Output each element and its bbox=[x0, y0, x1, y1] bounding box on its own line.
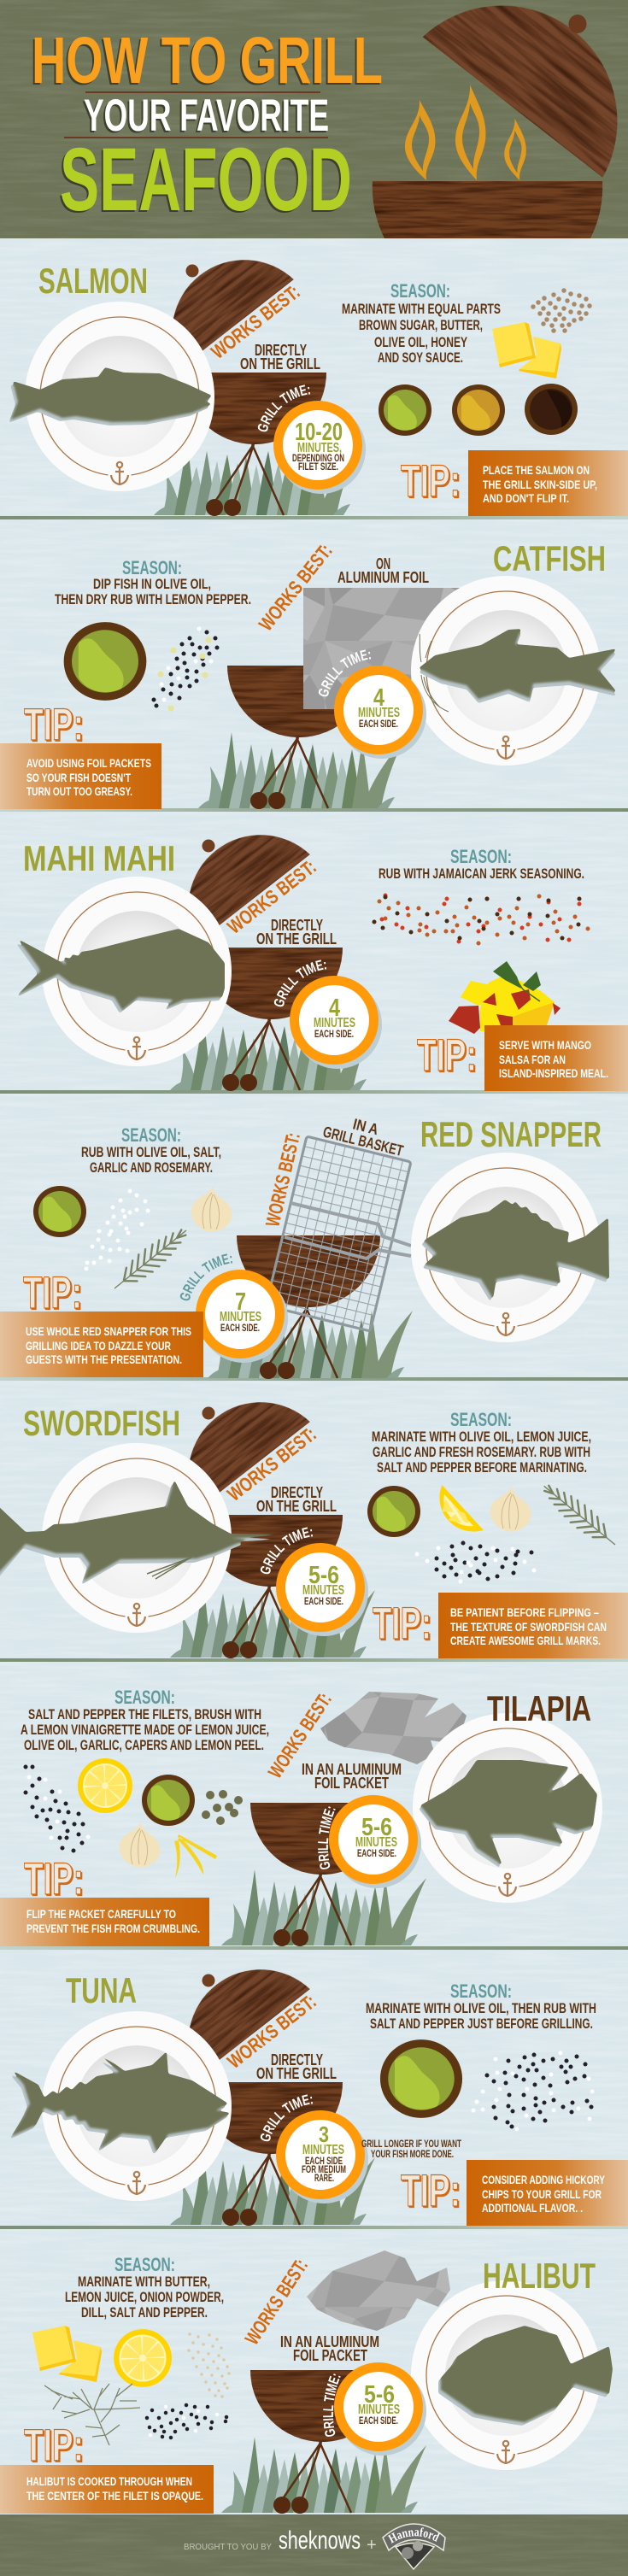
badge: time: FILET SIZE. bbox=[298, 462, 338, 472]
tip label: TIP: bbox=[401, 2166, 461, 2216]
heading: MAHI MAHI bbox=[23, 838, 175, 878]
icon: salt and pepper bbox=[417, 1543, 534, 1581]
text: grill longer note: YOUR FISH MORE DONE. bbox=[371, 2148, 454, 2160]
icon: catfish whiskers bbox=[420, 634, 449, 712]
icon: flames bbox=[405, 85, 526, 180]
text: method bbox=[321, 1115, 405, 1159]
text: method bbox=[256, 1484, 337, 1515]
badge: time bbox=[329, 1795, 421, 1888]
tip box bbox=[467, 2160, 628, 2226]
panel: red snapper bbox=[0, 1114, 609, 1379]
badge: time: 4 bbox=[373, 684, 384, 712]
badge: time: EACH SIDE. bbox=[359, 719, 398, 730]
footer panel bbox=[0, 2514, 628, 2576]
icon: swordfish fish bbox=[0, 1480, 292, 1585]
icon: garlic bbox=[120, 1822, 161, 1868]
text: season directions bbox=[366, 2001, 596, 2032]
badge: time: MINUTES bbox=[358, 2403, 400, 2417]
icon: grill bbox=[208, 1235, 413, 1379]
text: season directions: BROWN SUGAR, BUTTER, bbox=[359, 318, 483, 333]
panel: tuna bbox=[11, 1969, 628, 2226]
text: season directions bbox=[21, 1707, 269, 1753]
badge: time: MINUTES bbox=[355, 1835, 397, 1850]
tip label: TIP: bbox=[401, 456, 461, 507]
icon: salt bbox=[86, 1191, 148, 1269]
tip box: TURN OUT TOO GREASY. bbox=[26, 784, 132, 798]
icon: grill bbox=[160, 1374, 375, 1658]
badge: time: MINUTES, bbox=[297, 441, 342, 455]
tip box bbox=[0, 1898, 209, 1946]
badge: time bbox=[196, 1270, 288, 1363]
text: grill longer note bbox=[361, 2138, 461, 2160]
label: grill time: GRILL TIME: bbox=[260, 2094, 313, 2141]
icon: grill bbox=[221, 1803, 426, 1946]
icon: jerk seasoning bbox=[374, 895, 588, 943]
icon: grill bbox=[144, 232, 359, 516]
icon: catfish fish bbox=[419, 629, 617, 703]
text: season directions bbox=[342, 302, 501, 366]
section dividers bbox=[0, 516, 628, 2229]
icon: butter bbox=[492, 322, 561, 378]
icon: grill bbox=[198, 666, 403, 809]
badge: time: 7 bbox=[235, 1288, 246, 1316]
text: method: ON THE GRILL bbox=[256, 930, 337, 948]
badge: time: MINUTES bbox=[358, 706, 400, 720]
text: brought to you by: BROUGHT TO YOU BY bbox=[184, 2543, 272, 2552]
icon: salt and pepper bbox=[473, 2053, 592, 2129]
panel: catfish bbox=[0, 538, 615, 809]
icon: capers bbox=[206, 1794, 238, 1821]
icon: tilapia fish bbox=[419, 1760, 597, 1869]
icon: soy sauce bbox=[525, 384, 578, 435]
label: works best: WORKS BEST: bbox=[240, 2255, 312, 2349]
text: season directions: A LEMON VINAIGRETTE MADE OF LEMON JUICE, bbox=[21, 1722, 269, 1738]
text: season directions bbox=[65, 2274, 224, 2321]
icon: brown sugar bbox=[533, 290, 590, 331]
text: method: FOIL PACKET bbox=[293, 2347, 367, 2364]
label: season: SEASON: bbox=[122, 557, 182, 578]
text: season directions: MARINATE WITH EQUAL PARTS bbox=[342, 302, 501, 317]
badge: time: EACH SIDE bbox=[305, 2156, 343, 2167]
panel: swordfish bbox=[0, 1402, 628, 1658]
panel: salmon bbox=[9, 260, 628, 516]
badge: time: 10-20 bbox=[295, 419, 343, 446]
label: works best: WORKS BEST: bbox=[255, 539, 337, 635]
heading: SALMON bbox=[38, 261, 148, 301]
label: season: SEASON: bbox=[450, 1409, 512, 1430]
tip box: THE CENTER OF THE FILET IS OPAQUE. bbox=[26, 2489, 203, 2503]
tip box bbox=[484, 1025, 628, 1091]
logo: hannaford: Hannaford bbox=[388, 2527, 440, 2544]
badge: time bbox=[290, 976, 382, 1069]
tip box bbox=[0, 743, 161, 809]
text: season directions bbox=[55, 577, 251, 607]
icon: plate bbox=[413, 1713, 602, 1903]
tip box bbox=[438, 1593, 628, 1658]
badge: time bbox=[276, 2110, 368, 2203]
icon: foil packet bbox=[320, 1692, 467, 1764]
icon: lemon wedge bbox=[441, 1488, 481, 1530]
label: season: SEASON: bbox=[450, 1980, 512, 2002]
label: works best: WORKS BEST: bbox=[207, 280, 304, 363]
icon: swordfish fin bbox=[147, 1558, 191, 1579]
text: method: ON THE GRILL bbox=[256, 1498, 337, 1515]
label: grill time: GRILL TIME: bbox=[323, 2374, 341, 2437]
panel: halibut bbox=[0, 2250, 613, 2514]
icon: olive oil bbox=[33, 1186, 86, 1237]
badge: time: EACH SIDE. bbox=[357, 1849, 396, 1859]
tip label: TIP: bbox=[23, 1268, 82, 1318]
badge: time bbox=[334, 666, 426, 759]
badge: time: EACH SIDE. bbox=[304, 1597, 343, 1607]
text: method: ON bbox=[376, 555, 390, 572]
text: method: IN AN ALUMINUM bbox=[280, 2333, 379, 2350]
text: method: IN A bbox=[351, 1115, 380, 1138]
header panel bbox=[0, 0, 628, 238]
text: method: ON THE GRILL bbox=[240, 355, 320, 373]
icon: olive oil bbox=[379, 384, 431, 436]
tip box: HALIBUT IS COOKED THROUGH WHEN bbox=[26, 2474, 192, 2488]
tip box bbox=[0, 1311, 203, 1377]
tip box bbox=[468, 450, 628, 516]
icon: plate bbox=[411, 576, 601, 766]
label: works best: WORKS BEST: bbox=[261, 1130, 304, 1229]
badge: time bbox=[334, 2362, 426, 2456]
text: season directions: OLIVE OIL, HONEY bbox=[374, 335, 467, 350]
title: seafood: SEAFOOD bbox=[60, 130, 352, 230]
text: season directions: THEN DRY RUB WITH LEMON PEPPER. bbox=[55, 592, 251, 607]
text: method: DIRECTLY bbox=[255, 342, 307, 359]
icon: halibut fish bbox=[438, 2326, 613, 2426]
tip box: SO YOUR FISH DOESN'T bbox=[26, 771, 131, 784]
label: grill time: GRILL TIME: bbox=[258, 384, 310, 432]
panel: mahi mahi bbox=[17, 835, 628, 1091]
icon: butter bbox=[32, 2326, 102, 2382]
logo: hannaford bbox=[382, 2523, 446, 2570]
text: season directions: DILL, SALT AND PEPPER. bbox=[81, 2305, 208, 2321]
tip label: TIP: bbox=[24, 2421, 84, 2471]
icon: plate bbox=[25, 302, 214, 491]
tip label: TIP: bbox=[24, 1854, 84, 1904]
icon: grill bbox=[160, 1941, 375, 2226]
badge: time bbox=[276, 1543, 368, 1636]
label: season: SEASON: bbox=[450, 846, 512, 867]
badge: time: MINUTES bbox=[314, 1016, 355, 1030]
heading: TUNA bbox=[66, 1970, 137, 2010]
label: works best: WORKS BEST: bbox=[223, 1990, 320, 2073]
icon: grill bbox=[160, 807, 375, 1091]
text: method bbox=[280, 2333, 379, 2364]
badge: time: 5-6 bbox=[361, 1814, 392, 1841]
tip box: ADDITIONAL FLAVOR. . bbox=[482, 2201, 583, 2215]
label: works best: WORKS BEST: bbox=[263, 1688, 336, 1782]
badge: time: MINUTES bbox=[302, 1583, 344, 1598]
tip box: GUESTS WITH THE PRESENTATION. bbox=[26, 1353, 182, 1366]
text: season directions: GARLIC AND ROSEMARY. bbox=[90, 1160, 213, 1176]
badge: time: RARE. bbox=[314, 2174, 334, 2184]
icon: garlic bbox=[191, 1187, 232, 1232]
label: season: SEASON: bbox=[390, 280, 450, 302]
text: method: DIRECTLY bbox=[271, 1484, 323, 1501]
text: season directions: OLIVE OIL, GARLIC, CAPERS AND LEMON PEEL. bbox=[24, 1738, 264, 1753]
icon: plate bbox=[42, 1443, 232, 1633]
icon: lemon slice bbox=[114, 2329, 172, 2387]
icon: grill basket bbox=[266, 1136, 411, 1331]
icon: plate bbox=[411, 1153, 601, 1342]
icon: rosemary bbox=[537, 1477, 622, 1553]
badge: time: 3 bbox=[319, 2121, 329, 2147]
text: season directions: AND SOY SAUCE. bbox=[378, 350, 463, 366]
heading: SWORDFISH bbox=[23, 1403, 180, 1443]
text: method: DIRECTLY bbox=[271, 2051, 323, 2068]
badge: time: EACH SIDE. bbox=[359, 2416, 398, 2426]
icon: salmon fish bbox=[9, 367, 212, 425]
badge: time: MINUTES bbox=[220, 1310, 261, 1324]
text: method: ALUMINUM FOIL bbox=[337, 569, 429, 586]
badge: time: 4 bbox=[329, 995, 340, 1022]
icon: plate bbox=[42, 877, 232, 1066]
icon: honey bbox=[452, 384, 505, 436]
icon: olive oil bbox=[380, 2039, 462, 2118]
label: season: SEASON: bbox=[114, 1687, 175, 1708]
tip box: THE GRILL SKIN-SIDE UP, bbox=[483, 478, 597, 491]
icon: salt and pepper bbox=[147, 2405, 226, 2438]
label: works best: WORKS BEST: bbox=[223, 1423, 320, 1505]
plus sign: + bbox=[367, 2536, 377, 2555]
badge: time: EACH SIDE. bbox=[314, 1030, 354, 1040]
icon: plate bbox=[411, 2280, 601, 2470]
icon: olive oil bbox=[142, 1775, 195, 1826]
label: works best: WORKS BEST: bbox=[223, 855, 320, 938]
badge: time: 5-6 bbox=[308, 1562, 339, 1589]
text: method: FOIL PACKET bbox=[314, 1775, 389, 1792]
text: method bbox=[302, 1761, 402, 1792]
badge: time: MINUTES bbox=[302, 2143, 344, 2157]
text: season directions bbox=[372, 1429, 591, 1476]
icon: red snapper fish bbox=[421, 1200, 609, 1302]
text: season directions: RUB WITH OLIVE OIL, SALT, bbox=[81, 1145, 221, 1160]
icon: rosemary bbox=[108, 1222, 193, 1297]
label: season: SEASON: bbox=[121, 1124, 181, 1146]
icon: tuna fish bbox=[9, 2051, 231, 2155]
text: method bbox=[240, 342, 320, 373]
icon: salt and pepper bbox=[26, 1767, 88, 1851]
icon: mango salsa bbox=[449, 961, 561, 1034]
icon: header grill bbox=[373, 0, 628, 238]
text: season directions: DIP FISH IN OLIVE OIL, bbox=[93, 577, 211, 592]
label: grill time: GRILL TIME: bbox=[179, 1253, 232, 1300]
tip label: TIP: bbox=[417, 1030, 477, 1081]
logo: sheknows: sheknows bbox=[279, 2526, 361, 2555]
badge: time: DEPENDING ON bbox=[292, 454, 344, 464]
heading: TILAPIA bbox=[487, 1688, 591, 1728]
icon: olive oil bbox=[64, 622, 146, 701]
text: method: DIRECTLY bbox=[271, 917, 323, 934]
tip box: SALSA FOR AN bbox=[499, 1053, 566, 1066]
label: grill time: GRILL TIME: bbox=[273, 959, 326, 1006]
icon: dill bbox=[44, 2384, 140, 2445]
tip box: SERVE WITH MANGO bbox=[499, 1038, 591, 1052]
title: your favorite: YOUR FAVORITE bbox=[84, 91, 329, 141]
text: season directions: LEMON JUICE, ONION POWDER, bbox=[65, 2290, 224, 2305]
icon: mahi mahi fish bbox=[15, 929, 225, 1013]
text: method: GRILL BASKET bbox=[321, 1123, 405, 1159]
icon: onion powder bbox=[189, 2334, 229, 2397]
tip box: AVOID USING FOIL PACKETS bbox=[26, 756, 151, 770]
icon: grill bbox=[221, 2370, 426, 2514]
icon: plate bbox=[42, 2011, 232, 2201]
panel: tilapia bbox=[0, 1687, 602, 1946]
icon: garlic bbox=[490, 1487, 531, 1532]
icon: lemon pepper bbox=[154, 629, 217, 708]
label: grill time: GRILL TIME: bbox=[318, 1806, 336, 1869]
text: method bbox=[337, 555, 429, 586]
tip box: USE WHOLE RED SNAPPER FOR THIS bbox=[26, 1324, 191, 1338]
icon: aluminum foil bbox=[303, 588, 461, 709]
badge: time bbox=[273, 401, 366, 494]
tip box: AND DON'T FLIP IT. bbox=[483, 491, 569, 505]
text: season directions: SALT AND PEPPER THE FILETS, BRUSH WITH bbox=[28, 1707, 261, 1722]
text: season directions bbox=[81, 1145, 221, 1176]
label: grill time: GRILL TIME: bbox=[318, 649, 371, 697]
icon: lemon peel bbox=[174, 1834, 217, 1878]
text: method: IN AN ALUMINUM bbox=[302, 1761, 402, 1778]
icon: lemon slice bbox=[78, 1758, 132, 1813]
icon: olive oil bbox=[367, 1486, 420, 1537]
badge: time: 5-6 bbox=[364, 2381, 395, 2409]
label: season: SEASON: bbox=[114, 2254, 175, 2275]
text: method: ON THE GRILL bbox=[256, 2065, 337, 2082]
tip box: PREVENT THE FISH FROM CRUMBLING. bbox=[26, 1922, 200, 1935]
text: season directions: MARINATE WITH BUTTER, bbox=[78, 2274, 210, 2290]
tip box: PLACE THE SALMON ON bbox=[483, 463, 590, 477]
text: method bbox=[256, 2051, 337, 2082]
text: grill longer note: GRILL LONGER IF YOU WANT bbox=[361, 2138, 461, 2150]
tip box: GRILLING IDEA TO DAZZLE YOUR bbox=[26, 1339, 171, 1353]
tip box bbox=[0, 2465, 214, 2514]
text: method bbox=[256, 917, 337, 948]
icon: foil packet bbox=[307, 2250, 450, 2331]
badge: time: FOR MEDIUM bbox=[302, 2165, 346, 2175]
tip box: FLIP THE PACKET CAREFULLY TO bbox=[26, 1907, 176, 1921]
title: how to grill: HOW TO GRILL bbox=[32, 24, 383, 97]
label: grill time: GRILL TIME: bbox=[260, 1527, 313, 1574]
badge: time: EACH SIDE. bbox=[220, 1323, 260, 1334]
tip label: TIP: bbox=[373, 1599, 431, 1649]
tip label: TIP: bbox=[24, 700, 84, 750]
